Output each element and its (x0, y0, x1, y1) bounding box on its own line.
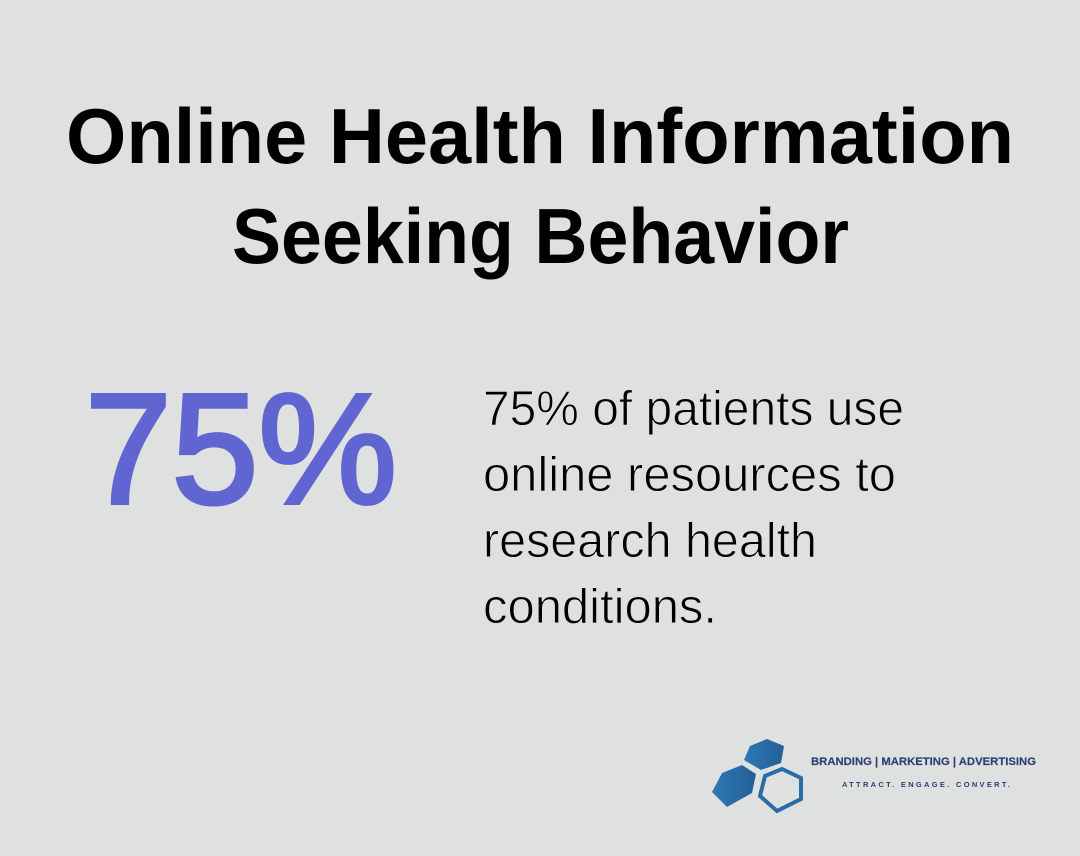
big statistic: 75%: 75% (85, 362, 397, 537)
logo tagline: BRANDING | MARKETING | ADVERTISING (811, 756, 1036, 768)
description text (483, 382, 904, 634)
description text: research health (483, 514, 817, 568)
description text: online resources to (483, 448, 896, 502)
icon: hexagon logo mark (712, 739, 801, 811)
title: Online Health Information (66, 92, 1014, 180)
description text: conditions. (483, 580, 717, 634)
logo tagline: ATTRACT. ENGAGE. CONVERT. (842, 780, 1010, 789)
title: Seeking Behavior (232, 192, 849, 280)
title (66, 92, 1014, 280)
description text: 75% of patients use (483, 382, 904, 436)
logo tagline (811, 756, 1036, 789)
logo (712, 739, 1036, 811)
